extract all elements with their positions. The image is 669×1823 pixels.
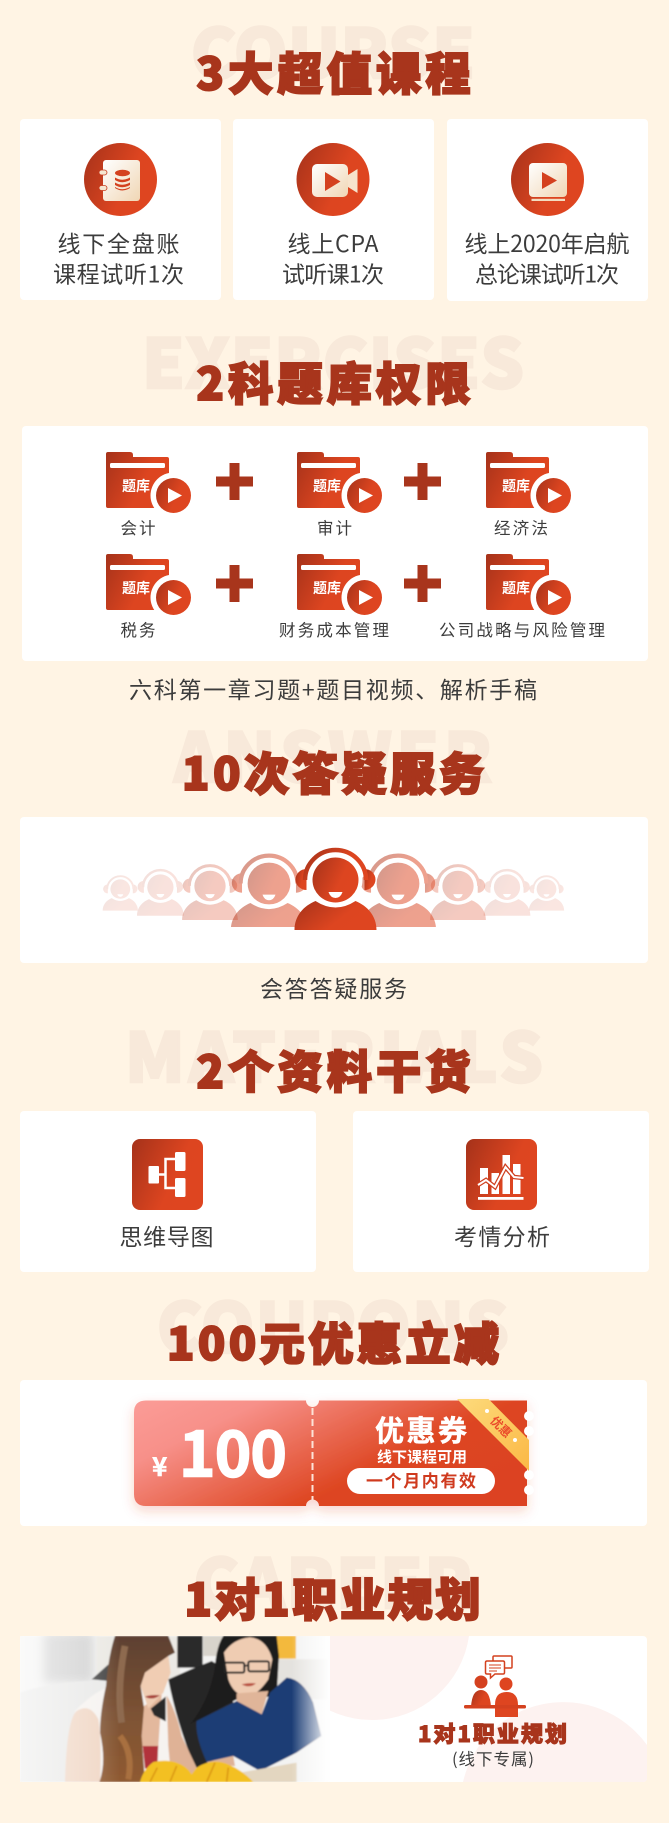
icon: play screen (511, 143, 584, 216)
icon: mind map (132, 1139, 203, 1210)
section: 3 courses (20, 0, 648, 301)
bank: 财务成本管理: 财务成本管理 (279, 617, 389, 641)
bank: 税务: 税务 (120, 617, 156, 641)
title: 2科题库权限 (196, 348, 470, 413)
plus (404, 565, 441, 602)
bank: 税务: 题库 (122, 578, 150, 598)
bank: 经济法 (486, 452, 576, 539)
title: 1对1职业规划 (184, 1564, 480, 1629)
photo: two women at laptop (20, 1633, 330, 1782)
plus (216, 463, 253, 500)
ticket (134, 1399, 534, 1506)
bank: 会计: 会计 (120, 515, 156, 539)
bank: 财务成本管理: 题库 (313, 578, 341, 598)
card: online CPA: 试听课1次 (282, 256, 384, 290)
card: online CPA (233, 119, 434, 300)
watermark EXERCISES: EXERCISES (142, 309, 524, 408)
bank: 审计: 题库 (313, 476, 341, 496)
title: 2个资料干货 (196, 1036, 470, 1101)
card text: 线下全盘账 (58, 225, 180, 259)
icon: video camera (296, 143, 370, 216)
watermark MATERIALS: MATERIALS (125, 1003, 543, 1102)
title: 10次答疑服务 (182, 738, 484, 803)
ticket: 线下课程可用 (377, 1446, 467, 1467)
card text: 线上2020年启航 (464, 225, 630, 259)
section: question banks (22, 309, 648, 705)
title: 100元优惠立减 (167, 1308, 499, 1373)
bank: 财务成本管理 (279, 554, 389, 641)
panel: career (20, 1633, 647, 1782)
card: offline course: 课程试听1次 (53, 256, 184, 290)
title: 3大超值课程 (196, 38, 470, 103)
bank: 公司战略与风险管理: 题库 (502, 578, 530, 598)
icon: consultation (464, 1656, 526, 1717)
bank: 会计: 题库 (122, 476, 150, 496)
career label: 1对1职业规划 (418, 1717, 567, 1749)
bank: 会计 (106, 452, 196, 539)
coupon heading: 优惠券 (375, 1408, 467, 1450)
section: materials (20, 1003, 649, 1272)
bank: 公司战略与风险管理 (439, 554, 605, 641)
plus (404, 463, 441, 500)
career sublabel: (线下专属) (452, 1746, 534, 1770)
ticket: 优惠 (487, 1412, 516, 1441)
icon: chart (466, 1139, 537, 1210)
bank: 审计: 审计 (317, 515, 352, 539)
agent row (103, 850, 564, 932)
ticket: 一个月内有效 (366, 1467, 476, 1492)
bank: 经济法: 题库 (502, 476, 530, 496)
plus (216, 565, 253, 602)
card: online 2020 (447, 119, 648, 301)
caption: 会答答疑服务 (260, 970, 407, 1004)
watermark CAREER: CAREER (194, 1529, 472, 1628)
panel: agents (20, 817, 648, 963)
amount: ¥ (152, 1447, 167, 1484)
card: mind map (20, 1111, 316, 1272)
bank: 经济法: 经济法 (494, 515, 548, 539)
bank: 审计 (297, 452, 388, 539)
card: online 2020: 总论课试听1次 (475, 256, 619, 290)
section: answers (20, 703, 648, 1004)
bank: 税务 (106, 554, 196, 641)
card: exam analysis (353, 1111, 649, 1272)
card text: 考情分析 (454, 1218, 550, 1252)
card text: 线上CPA (288, 225, 379, 259)
section: career (20, 1556, 647, 1782)
validity pill (347, 1468, 495, 1494)
card text: 思维导图 (120, 1218, 214, 1252)
icon: ledger (84, 143, 157, 216)
watermark ANSWER: ANSWER (173, 703, 492, 802)
panel: coupon (20, 1380, 647, 1526)
bank: 公司战略与风险管理: 公司战略与风险管理 (439, 617, 605, 641)
section: coupon (20, 1273, 647, 1526)
card: offline course (20, 119, 221, 300)
watermark COUPONS: COUPONS (157, 1273, 509, 1372)
caption: 六科第一章习题+题目视频、解析手稿 (129, 671, 537, 705)
panel: banks (22, 426, 648, 661)
ribbon (457, 1399, 529, 1471)
ticket: 100 (179, 1404, 287, 1494)
watermark COURSE: COURSE (191, 0, 475, 98)
